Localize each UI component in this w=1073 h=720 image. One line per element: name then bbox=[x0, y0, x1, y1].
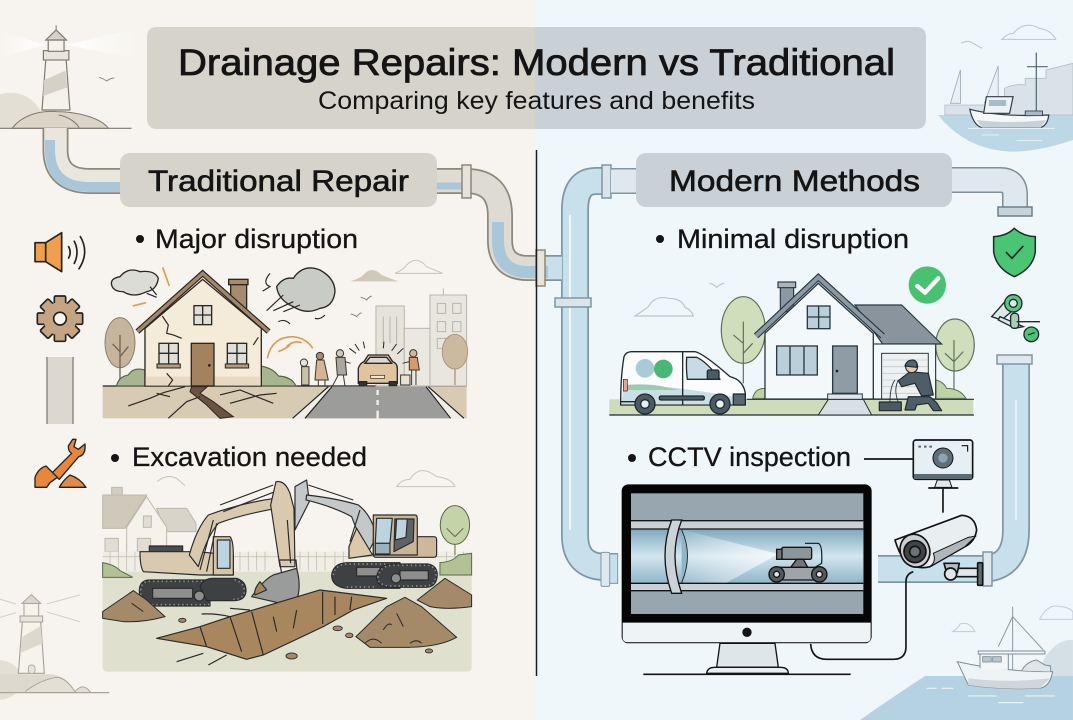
left pipe stub bbox=[601, 552, 618, 586]
city buildings bbox=[376, 288, 467, 386]
title: Drainage Repairs: Modern vs Traditional bbox=[178, 42, 895, 83]
tree left bbox=[105, 318, 135, 380]
icon: robot arm bbox=[992, 295, 1040, 342]
dirt mounds bbox=[103, 578, 472, 647]
bushes bbox=[117, 366, 296, 386]
bushes bbox=[753, 380, 966, 398]
divider line bbox=[536, 150, 538, 676]
trench bbox=[157, 590, 387, 665]
icon: green shield bbox=[994, 228, 1035, 277]
bushes bbox=[103, 553, 472, 577]
pipe: traditional left run bbox=[50, 128, 122, 187]
site ground bbox=[103, 572, 472, 672]
fence bbox=[103, 552, 472, 572]
icon: pipe segment bbox=[47, 357, 73, 424]
orange impact marks bbox=[133, 267, 313, 358]
small monitor icon bbox=[913, 440, 973, 513]
illustration: excavation scene bbox=[103, 471, 472, 672]
tree right bbox=[442, 334, 468, 385]
pipe: traditional to modern connector bbox=[435, 165, 548, 286]
lighthouse: bottom left bbox=[0, 595, 109, 700]
service van bbox=[620, 352, 745, 414]
birds bbox=[351, 296, 372, 317]
panel: traditional side background bbox=[0, 0, 535, 720]
boat: bottom right harbour bbox=[860, 606, 1073, 720]
inspection robot bbox=[769, 543, 827, 582]
heading: modern methods: Modern Methods bbox=[669, 165, 920, 198]
bullet: major disruption: Major disruption bbox=[155, 224, 358, 254]
bullet: excavation needed: Excavation needed bbox=[132, 442, 367, 472]
house bbox=[137, 273, 269, 386]
house bbox=[756, 277, 942, 399]
heading: traditional repair bbox=[120, 153, 437, 207]
title panel bbox=[147, 27, 926, 129]
security camera bbox=[895, 515, 983, 585]
heading: modern methods bbox=[636, 153, 952, 207]
inspected pipe view bbox=[631, 520, 863, 593]
bullet: CCTV inspection: CCTV inspection bbox=[648, 442, 851, 472]
icon: gear bbox=[37, 296, 83, 341]
illustration: major disruption scene bbox=[103, 260, 468, 418]
bullet: minimal disruption: Minimal disruption bbox=[677, 224, 909, 254]
background house bbox=[103, 487, 196, 553]
worker bbox=[879, 360, 942, 411]
trees bbox=[721, 297, 974, 390]
pipe: modern top right bbox=[950, 180, 1032, 216]
ground cracks bbox=[128, 387, 277, 418]
lighthouse: top left bbox=[0, 25, 138, 158]
tree bbox=[440, 506, 470, 555]
pipe: modern lower right bbox=[878, 355, 1032, 586]
road bbox=[293, 387, 465, 418]
people bbox=[300, 350, 419, 386]
illustration: CCTV inspection bbox=[601, 440, 983, 674]
illustration: minimal disruption scene bbox=[609, 266, 974, 415]
stones bbox=[179, 618, 433, 659]
cloud and bird bbox=[635, 283, 724, 316]
callout line bbox=[864, 456, 913, 461]
icon: speaker bbox=[35, 233, 85, 272]
subtitle: Comparing key features and benefits bbox=[318, 87, 755, 115]
cable bbox=[811, 572, 913, 659]
path bbox=[818, 399, 872, 415]
background clouds bbox=[350, 260, 443, 281]
pipe: modern main vertical bbox=[548, 165, 638, 567]
lawn bbox=[609, 399, 973, 415]
clouds bbox=[157, 471, 455, 487]
ground bbox=[103, 386, 467, 418]
panel: modern side background bbox=[535, 0, 1073, 720]
heading: traditional repair: Traditional Repair bbox=[148, 165, 409, 198]
grey excavator bbox=[295, 480, 437, 588]
boat: top right harbour bbox=[938, 25, 1073, 152]
beige excavator bbox=[139, 481, 299, 606]
grey cloud left bbox=[111, 270, 158, 295]
icon: wrench and shovel bbox=[35, 439, 86, 487]
motion marks bbox=[147, 273, 325, 324]
check badge bbox=[909, 266, 946, 304]
car bbox=[349, 342, 403, 386]
main monitor bbox=[622, 484, 872, 674]
grey cloud right bbox=[277, 268, 335, 311]
